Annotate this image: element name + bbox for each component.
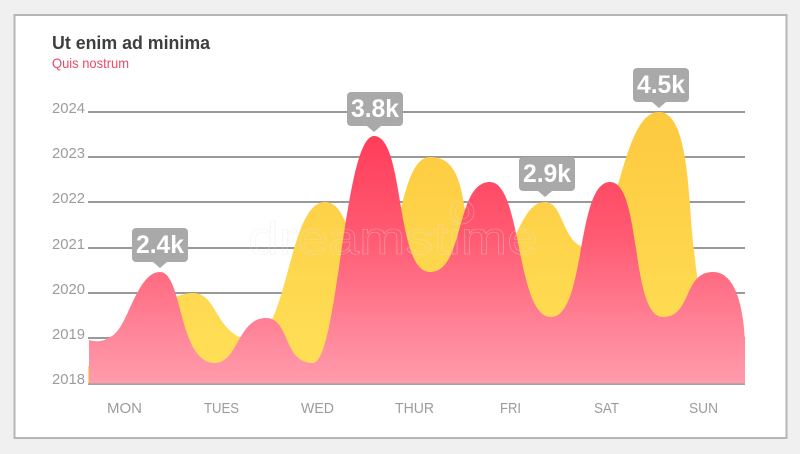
area: red series	[89, 136, 745, 384]
y axis labels: 2022	[52, 190, 85, 207]
y axis labels: 2024	[52, 100, 85, 117]
subtitle: Quis nostrum	[52, 55, 129, 71]
y axis labels: 2020	[52, 281, 85, 298]
callout: 3.8k	[347, 92, 403, 132]
area: yellow series	[88, 112, 710, 384]
y axis labels	[52, 100, 85, 388]
y axis labels: 2023	[52, 145, 85, 162]
callout: 4.5k	[633, 68, 689, 108]
callout: 2.4k: 2.4k	[136, 231, 184, 259]
x axis labels: WED	[301, 400, 334, 417]
y axis labels: 2018	[52, 371, 85, 388]
x axis labels: TUES	[204, 400, 239, 417]
x axis labels: MON	[107, 400, 142, 417]
x axis labels	[107, 400, 718, 417]
y axis labels: 2019	[52, 326, 85, 343]
watermark: dreamstime	[248, 212, 538, 264]
callout: 3.8k: 3.8k	[351, 95, 399, 123]
x axis labels: SUN	[689, 400, 718, 417]
watermark	[248, 200, 538, 264]
x axis labels: THUR	[395, 400, 434, 417]
y axis labels: 2021	[52, 236, 85, 253]
x axis labels: FRI	[500, 400, 521, 417]
title: Ut enim ad minima	[52, 33, 211, 53]
callout: 4.5k: 4.5k	[637, 71, 685, 99]
callout: 2.9k: 2.9k	[523, 160, 571, 188]
callout: 2.4k	[132, 228, 188, 268]
x axis labels: SAT	[594, 400, 619, 417]
callout: 2.9k	[519, 157, 575, 197]
